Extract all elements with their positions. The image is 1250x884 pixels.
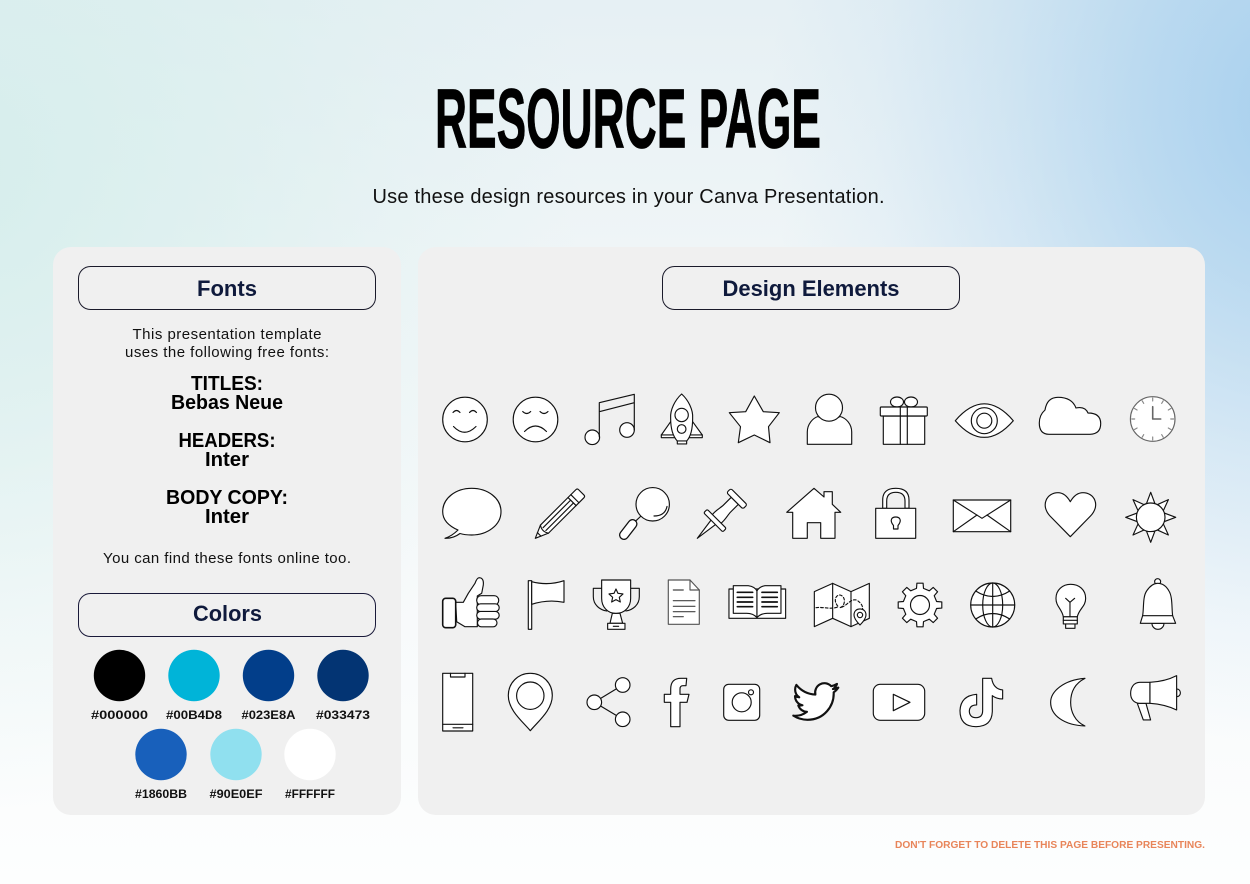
- icon: gift: [880, 397, 927, 444]
- icon: heart: [1045, 493, 1096, 537]
- footer note: DON'T FORGET TO DELETE THIS PAGE BEFORE PRESENTING.: [895, 839, 1205, 851]
- heading: fonts: Fonts: [197, 276, 257, 301]
- heading: fonts: [78, 266, 376, 310]
- swatch: 1860BB: #1860BB: [135, 787, 187, 801]
- heading: design elements: Design Elements: [722, 276, 900, 301]
- text: headers font: Inter: [205, 449, 249, 471]
- icon: padlock: [876, 488, 916, 538]
- icon: smile: [443, 397, 487, 442]
- swatch: 033473: [316, 650, 370, 722]
- icon: flag: [528, 581, 564, 629]
- panel: design elements: [418, 247, 1205, 815]
- icon: facebook: [664, 678, 689, 727]
- subtitle: Use these design resources in your Canva Presentation.: [372, 186, 884, 208]
- icon: youtube: [873, 684, 925, 720]
- icon: twitter: [793, 683, 838, 720]
- icon: music note: [585, 394, 634, 445]
- icon: gear: [898, 583, 942, 627]
- icon: star: [729, 396, 779, 443]
- icon: magnifier: [624, 488, 669, 535]
- icon: sun: [1126, 492, 1176, 542]
- swatch: 000000: [91, 650, 148, 722]
- icon: document: [668, 580, 699, 624]
- text: fonts intro: This presentation template: [132, 326, 322, 343]
- text: titles font: Bebas Neue: [171, 392, 283, 414]
- text: fonts intro: uses the following free fonts:: [125, 344, 329, 361]
- swatch: 90E0EF: #90E0EF: [210, 787, 262, 801]
- icon: cloud: [1039, 397, 1101, 434]
- swatch: FFFFFF: #FFFFFF: [285, 787, 335, 801]
- text: fonts note: You can find these fonts online too.: [103, 550, 351, 567]
- icon: open book: [729, 586, 786, 618]
- swatch: FFFFFF: [284, 729, 336, 801]
- heading: colors: [78, 594, 376, 636]
- text: body copy font: BODY COPY:: [166, 487, 288, 509]
- icon: sad face: [513, 397, 558, 442]
- icon: tiktok: [960, 678, 1003, 727]
- icon: house: [787, 488, 841, 538]
- icon: smartphone: [443, 673, 473, 731]
- icon: moon: [1051, 678, 1085, 726]
- icon: trophy: [593, 580, 639, 629]
- text: body copy font: Inter: [205, 506, 249, 528]
- icon: instagram: [724, 684, 760, 720]
- text: titles font: [171, 373, 283, 414]
- icon: bell: [1140, 579, 1176, 629]
- icon: globe: [971, 583, 1015, 627]
- icon: envelope: [953, 500, 1011, 532]
- swatch: 000000: #000000: [91, 708, 148, 722]
- icon: speech bubble: [443, 488, 501, 538]
- icon: push pin: [688, 487, 749, 548]
- heading: design elements: [662, 266, 960, 310]
- swatch: 1860BB: [135, 729, 187, 801]
- icon: eye: [955, 404, 1013, 437]
- title: RESOURCE PAGE: [435, 72, 821, 166]
- icon: thumbs up: [443, 578, 499, 628]
- icon: share: [587, 678, 630, 727]
- panel: fonts and colors: [53, 247, 401, 815]
- icon: clock: [1130, 397, 1175, 441]
- heading: colors: Colors: [193, 601, 262, 626]
- icon: pencil: [531, 488, 585, 542]
- icon: person: [807, 394, 852, 444]
- text: fonts intro: [125, 326, 329, 361]
- swatch: 033473: #033473: [316, 708, 370, 722]
- icon: light bulb: [1056, 584, 1086, 628]
- text: headers font: HEADERS:: [178, 430, 276, 452]
- icon: location pin: [508, 673, 552, 731]
- swatch: 00B4D8: [166, 650, 222, 722]
- swatch: 90E0EF: [210, 729, 262, 801]
- icon: rocket: [661, 394, 702, 444]
- icon: megaphone: [1131, 676, 1180, 720]
- swatch: 00B4D8: #00B4D8: [166, 708, 222, 722]
- text: headers font: [178, 430, 276, 471]
- icon: map: [814, 583, 869, 627]
- swatch: 023E8A: #023E8A: [242, 708, 296, 722]
- text: titles font: TITLES:: [191, 373, 263, 395]
- swatch: 023E8A: [242, 650, 296, 722]
- text: body copy font: [166, 487, 288, 528]
